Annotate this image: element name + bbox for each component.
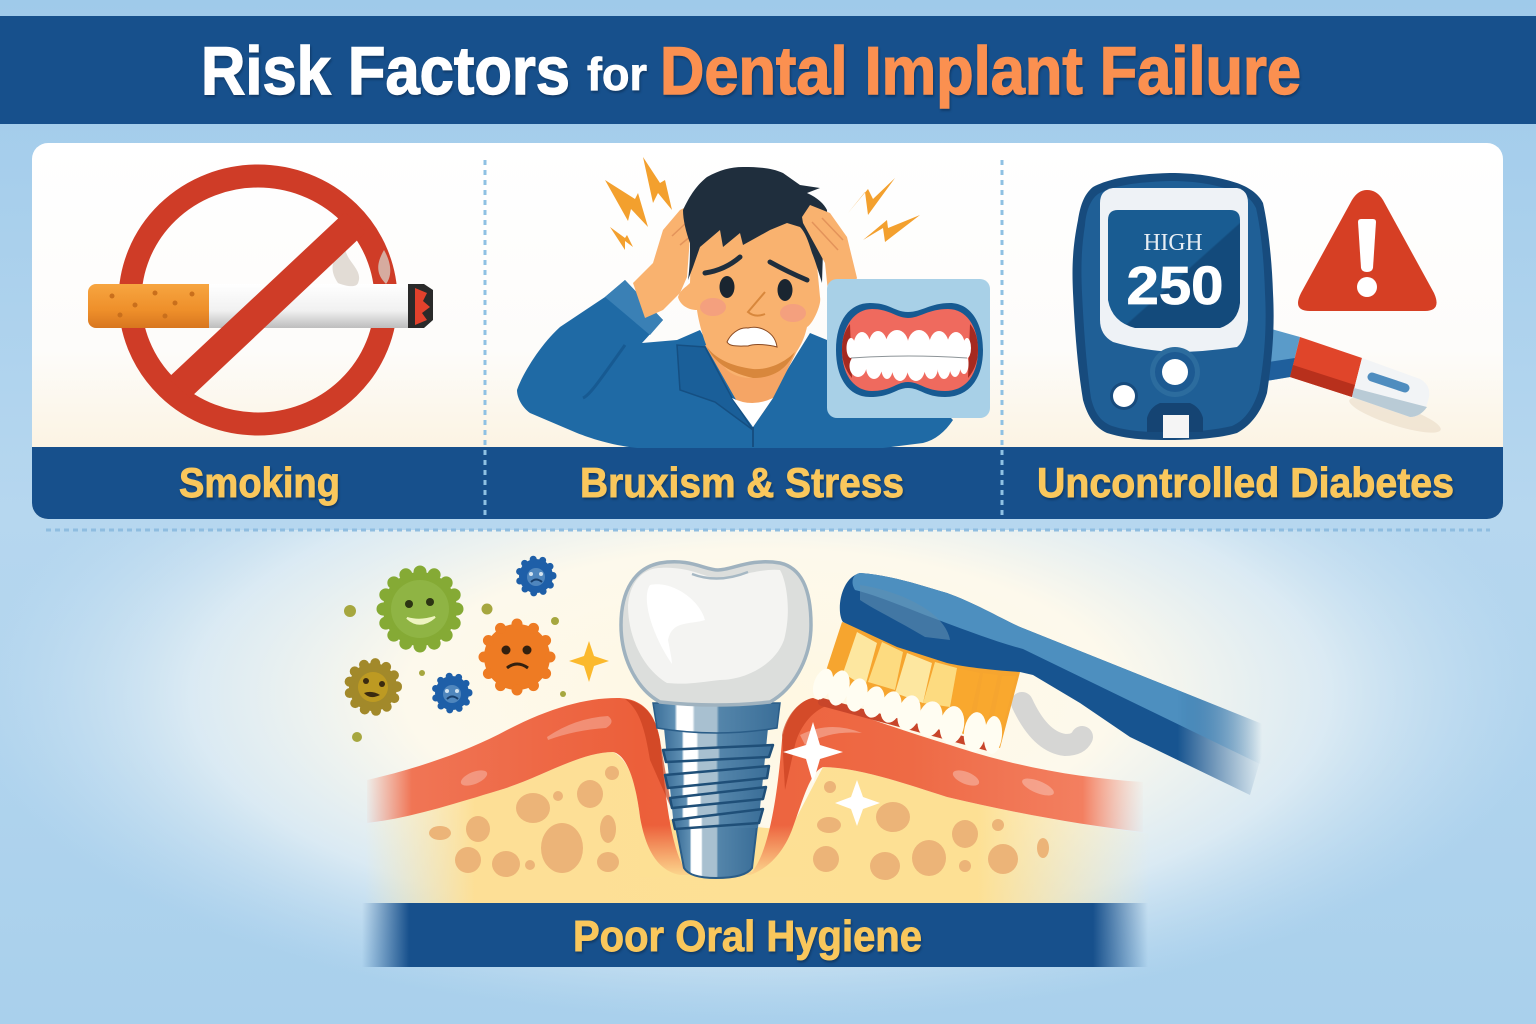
bacterium: orange — [484, 624, 550, 690]
bacterium: green — [383, 572, 457, 646]
icon: cigarette — [88, 284, 433, 328]
icon: glucose meter — [1073, 173, 1444, 440]
header band with title — [0, 16, 1536, 124]
icon: glucose meter: 250 — [1126, 256, 1224, 316]
icon: smoke — [333, 245, 390, 286]
icon: stressed man — [517, 157, 953, 448]
bacteria cluster — [344, 559, 566, 742]
gritted teeth — [727, 327, 777, 347]
spores — [344, 604, 566, 742]
hand right — [802, 205, 857, 298]
title: Risk Factors — [201, 33, 570, 109]
screen — [1108, 210, 1240, 328]
icon: toothbrush — [809, 573, 1270, 795]
head — [678, 212, 820, 378]
bacterium: olive — [349, 663, 397, 711]
label: smoking: Smoking — [179, 459, 340, 506]
panel: poor oral hygiene illustration — [344, 559, 1270, 967]
icon: warning triangle — [1298, 190, 1437, 311]
inset: clenched teeth — [827, 279, 990, 418]
label: poor oral hygiene: Poor Oral Hygiene — [573, 912, 922, 961]
panel: top risk factors — [32, 143, 1503, 519]
icon: implant — [621, 562, 811, 878]
screen frame — [1100, 188, 1248, 352]
toothpaste smear — [1022, 703, 1082, 745]
title — [201, 33, 1301, 109]
bristles — [809, 622, 1020, 755]
screw — [653, 703, 780, 878]
jaw bone — [365, 752, 1150, 903]
title: for — [587, 48, 647, 100]
label: bruxism and stress: Bruxism & Stress — [580, 459, 904, 506]
test strip tube — [1266, 328, 1444, 439]
strip port — [1147, 403, 1203, 432]
title: Dental Implant Failure — [660, 33, 1301, 109]
eyes and brows — [720, 276, 734, 298]
icon: no smoking — [88, 176, 433, 424]
hair — [683, 167, 827, 283]
buttons — [1150, 347, 1200, 397]
neck and undershirt — [705, 345, 800, 427]
gum tissue — [367, 698, 1143, 875]
icon: sparkles — [569, 641, 880, 826]
lightning bolts — [605, 157, 920, 250]
reading: HIGH — [1144, 230, 1202, 256]
bacterium: blue top — [519, 559, 553, 593]
arm left and hand — [633, 200, 710, 318]
label: uncontrolled diabetes: Uncontrolled Diabetes — [1037, 459, 1454, 506]
crown — [621, 562, 811, 705]
brush handle — [840, 573, 1270, 795]
shirt — [517, 280, 953, 448]
band: poor oral hygiene — [362, 903, 1148, 967]
bacterium: blue bottom — [435, 676, 469, 710]
